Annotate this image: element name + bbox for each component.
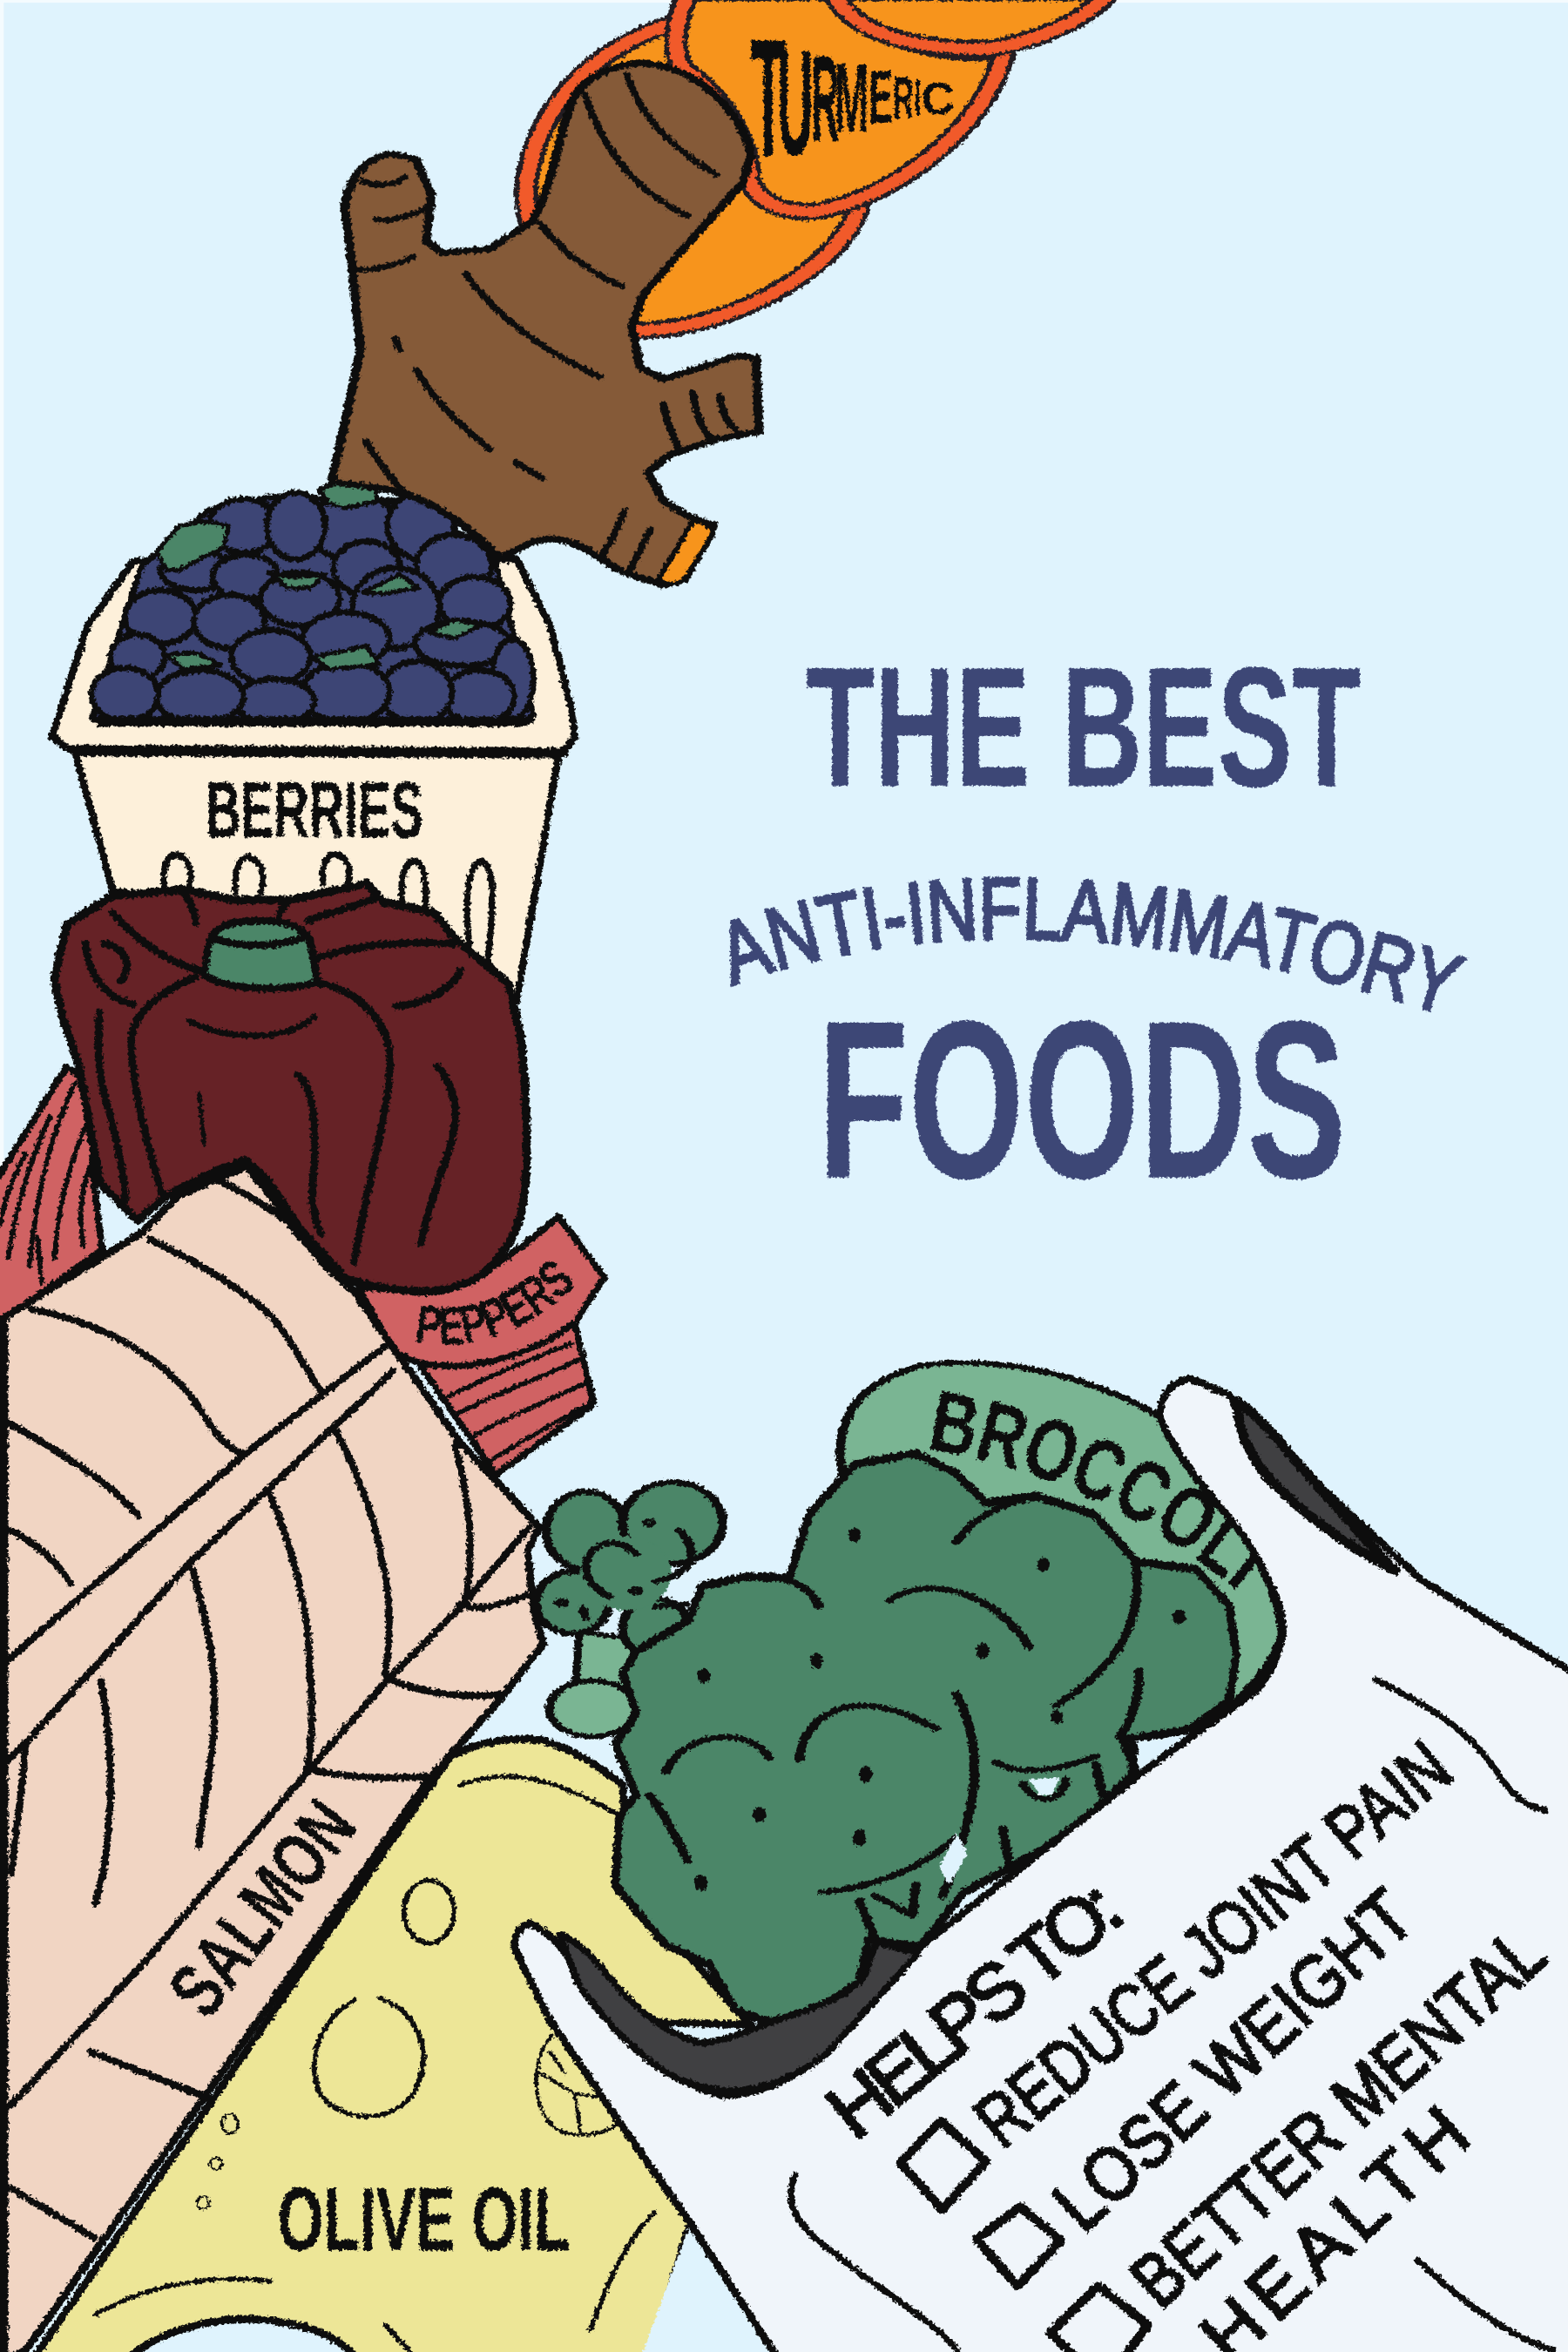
curved path for subtitle (733, 938, 1468, 1023)
curve: broccoli label (926, 1449, 1240, 1593)
salmon lines (0, 1180, 533, 2238)
checklist heading: HELPS TO: (810, 1863, 1138, 2155)
oil details (95, 1776, 655, 2351)
broccoli contours and dots (649, 1497, 1186, 1942)
panel: red bell pepper (54, 883, 527, 1292)
title line 2: ANTI-INFLAMMATORY (728, 876, 1469, 1012)
right glass (641, 2223, 758, 2352)
basket slots (164, 855, 492, 963)
pepper stem (204, 921, 317, 989)
paper pencil strokes (791, 1680, 1553, 2350)
panel: berry basket (52, 483, 575, 1001)
panel: salmon fillet (0, 1167, 544, 2352)
icon: ginger root (331, 64, 759, 585)
lemon slice (537, 2036, 620, 2135)
label: turmeric: I (914, 68, 922, 127)
checkboxes (900, 2121, 1148, 2352)
label: turmeric: T (750, 3, 787, 192)
ginger creases (353, 74, 738, 571)
sky gaps (1030, 1777, 1059, 1795)
checklist item 2: LOSE WEIGHT (1037, 1874, 1429, 2247)
ginger tip (659, 521, 712, 584)
checklist item 1: REDUCE JOINT PAIN (960, 1726, 1467, 2164)
curve: peppers label (414, 1282, 579, 1344)
pepper creases (85, 891, 461, 1262)
panel: checklist paper (514, 1378, 1568, 2352)
panel: broccoli label sleeve (841, 1363, 1282, 1721)
oil bottle opening (127, 2319, 355, 2352)
basket rim (52, 559, 575, 753)
blueberries (91, 492, 533, 724)
panel: olive oil bottle (25, 1739, 758, 2352)
label: turmeric: E (868, 56, 893, 139)
label: turmeric: M (835, 44, 868, 153)
berry leaves (156, 483, 481, 669)
label: olive oil: OLIVE OIL (278, 2168, 571, 2269)
label: berries: BERRIES (206, 766, 423, 855)
label: turmeric: U (777, 19, 814, 186)
panel: pepper wrapper back (0, 1066, 105, 1322)
icon: turmeric slices (526, 0, 1110, 330)
gray inner fold at tip (559, 1935, 918, 2091)
label: turmeric: R (893, 64, 914, 132)
panel: pepper wrapper front (358, 1216, 605, 1475)
basket body (75, 753, 558, 1001)
panel: broccoli head (615, 1454, 1236, 2022)
icon: small broccoli floret (536, 1482, 723, 1737)
label: peppers: PEPPERS (415, 1260, 574, 1345)
gray fold top right (1236, 1401, 1396, 1571)
label: salmon: SALMON (152, 1783, 373, 2032)
label: turmeric: C (922, 73, 955, 124)
label: turmeric: R (812, 30, 839, 167)
label: broccoli: BROCCOLI (929, 1390, 1255, 1591)
title (728, 631, 1469, 1226)
